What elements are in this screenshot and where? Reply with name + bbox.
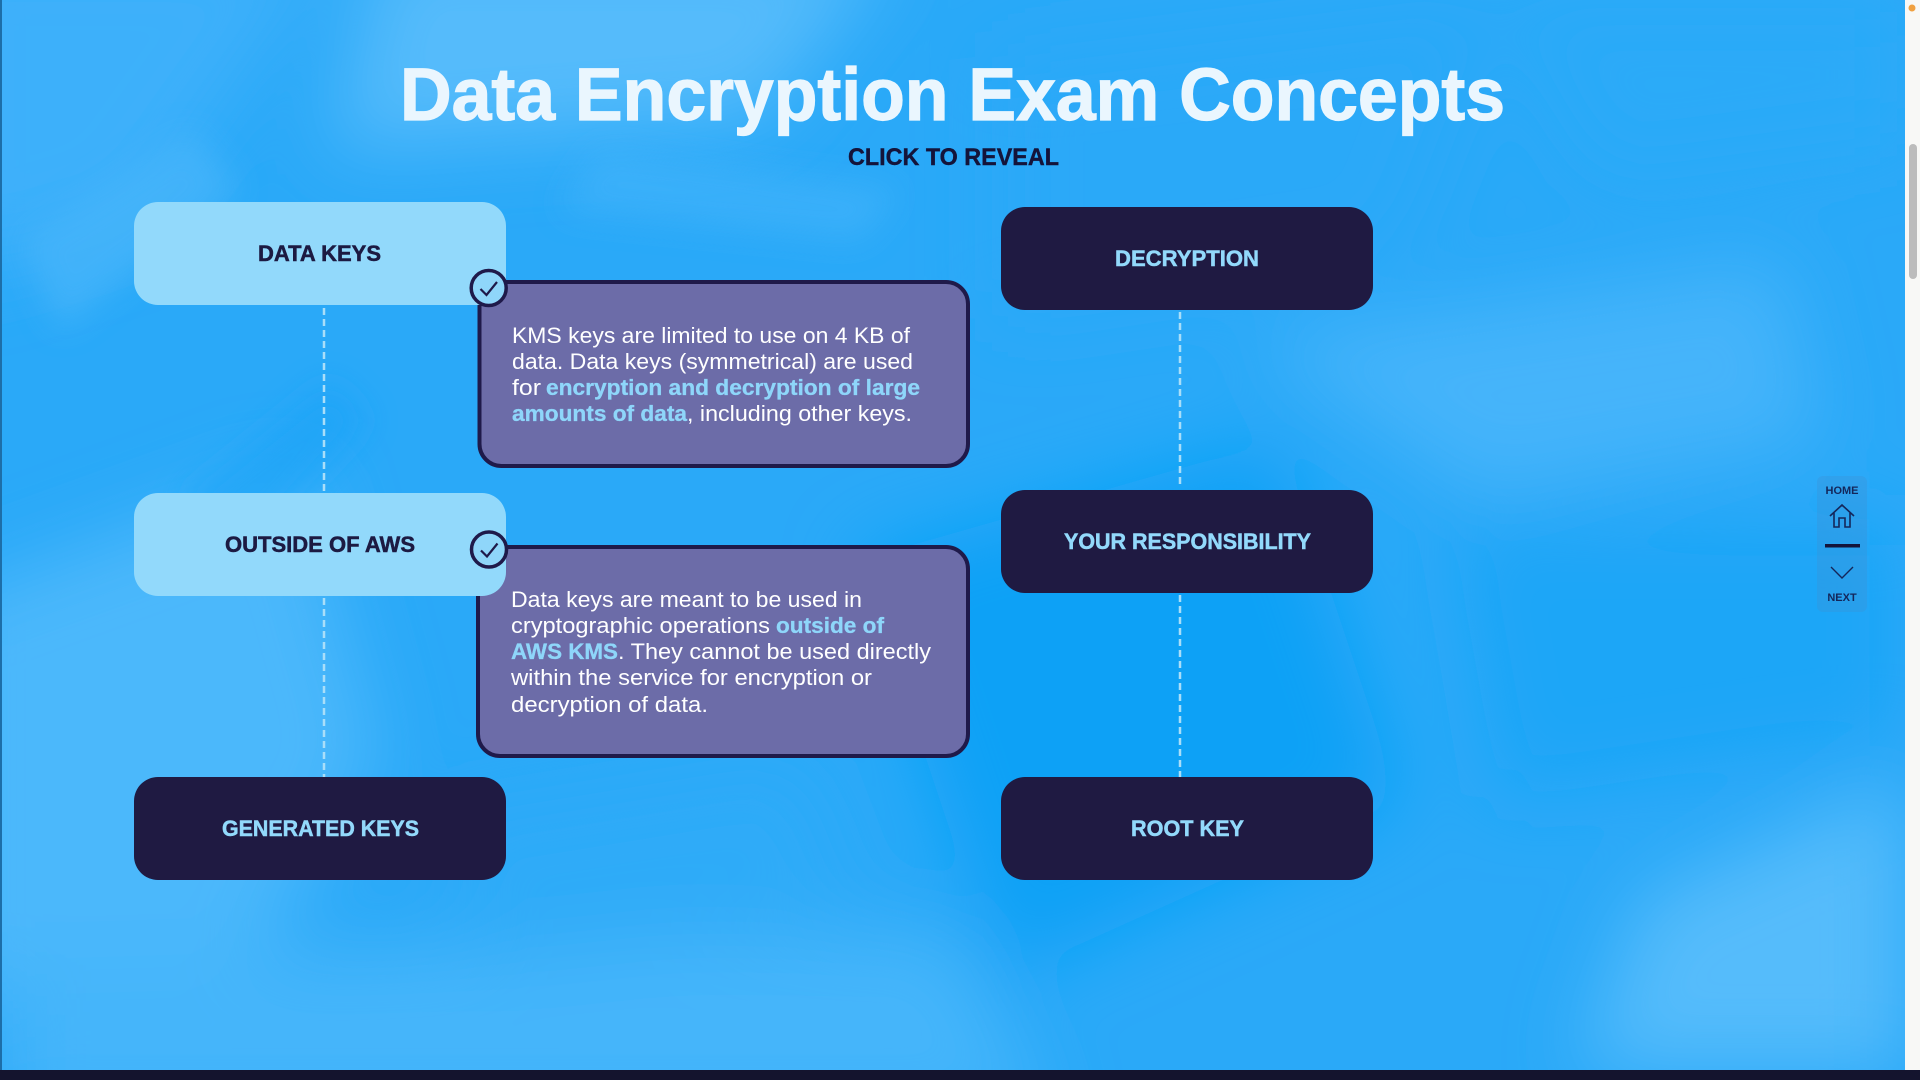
scrollbar bbox=[1905, 0, 1920, 1070]
card: root key bbox=[1001, 777, 1373, 880]
card: outside of aws: OUTSIDE OF AWS bbox=[225, 532, 415, 557]
panel: outside of aws explanation: . They cannot be used directly bbox=[618, 639, 931, 664]
left page edge bbox=[0, 0, 2, 1070]
panel: outside of aws explanation: cryptographic operations bbox=[511, 613, 770, 638]
icon: check badge 1 bbox=[471, 270, 506, 306]
panel: outside of aws explanation: decryption of data. bbox=[511, 692, 708, 717]
card: your responsibility: YOUR RESPONSIBILITY bbox=[1064, 529, 1311, 554]
panel: outside of aws explanation: outside of bbox=[776, 613, 885, 638]
connectors: left column bbox=[323, 308, 325, 777]
nav: next label: NEXT bbox=[1827, 592, 1857, 604]
panel: outside of aws explanation: Data keys are meant to be used in bbox=[511, 587, 862, 612]
icon: chevron next bbox=[1831, 567, 1853, 578]
bottom bar bbox=[0, 1070, 1920, 1080]
icon: check badge 2 bbox=[472, 532, 506, 567]
panel: data keys explanation: amounts of data bbox=[512, 401, 688, 426]
card: generated keys: GENERATED KEYS bbox=[222, 816, 419, 841]
panel: outside of aws explanation: AWS KMS bbox=[511, 639, 618, 664]
panel: outside of aws explanation: within the service for encryption or bbox=[510, 665, 872, 690]
panel: data keys explanation: for bbox=[512, 375, 541, 400]
connectors: right column bbox=[1179, 312, 1181, 777]
icon: home bbox=[1830, 505, 1854, 527]
panel: data keys explanation: data. Data keys (symmetrical) are used bbox=[512, 349, 913, 374]
subtitle: CLICK TO REVEAL bbox=[848, 144, 1059, 171]
card: decryption bbox=[1001, 207, 1373, 310]
panel: data keys explanation: KMS keys are limited to use on 4 KB of bbox=[512, 323, 911, 348]
card: generated keys bbox=[134, 777, 506, 880]
panel: data keys explanation bbox=[480, 282, 968, 466]
card: your responsibility bbox=[1001, 490, 1373, 593]
nav: home label: HOME bbox=[1826, 485, 1858, 497]
card: data keys bbox=[134, 202, 506, 305]
card: root key: ROOT KEY bbox=[1131, 816, 1244, 841]
card: outside of aws bbox=[134, 493, 506, 596]
title: Data Encryption Exam Concepts bbox=[400, 53, 1505, 136]
panel: data keys explanation: , including other keys. bbox=[687, 401, 912, 426]
card: decryption: DECRYPTION bbox=[1115, 246, 1259, 271]
panel: outside of aws explanation bbox=[478, 547, 968, 756]
navigation widget bbox=[1817, 476, 1867, 612]
card: data keys: DATA KEYS bbox=[258, 241, 381, 266]
panel: data keys explanation: encryption and decryption of large bbox=[546, 375, 920, 400]
